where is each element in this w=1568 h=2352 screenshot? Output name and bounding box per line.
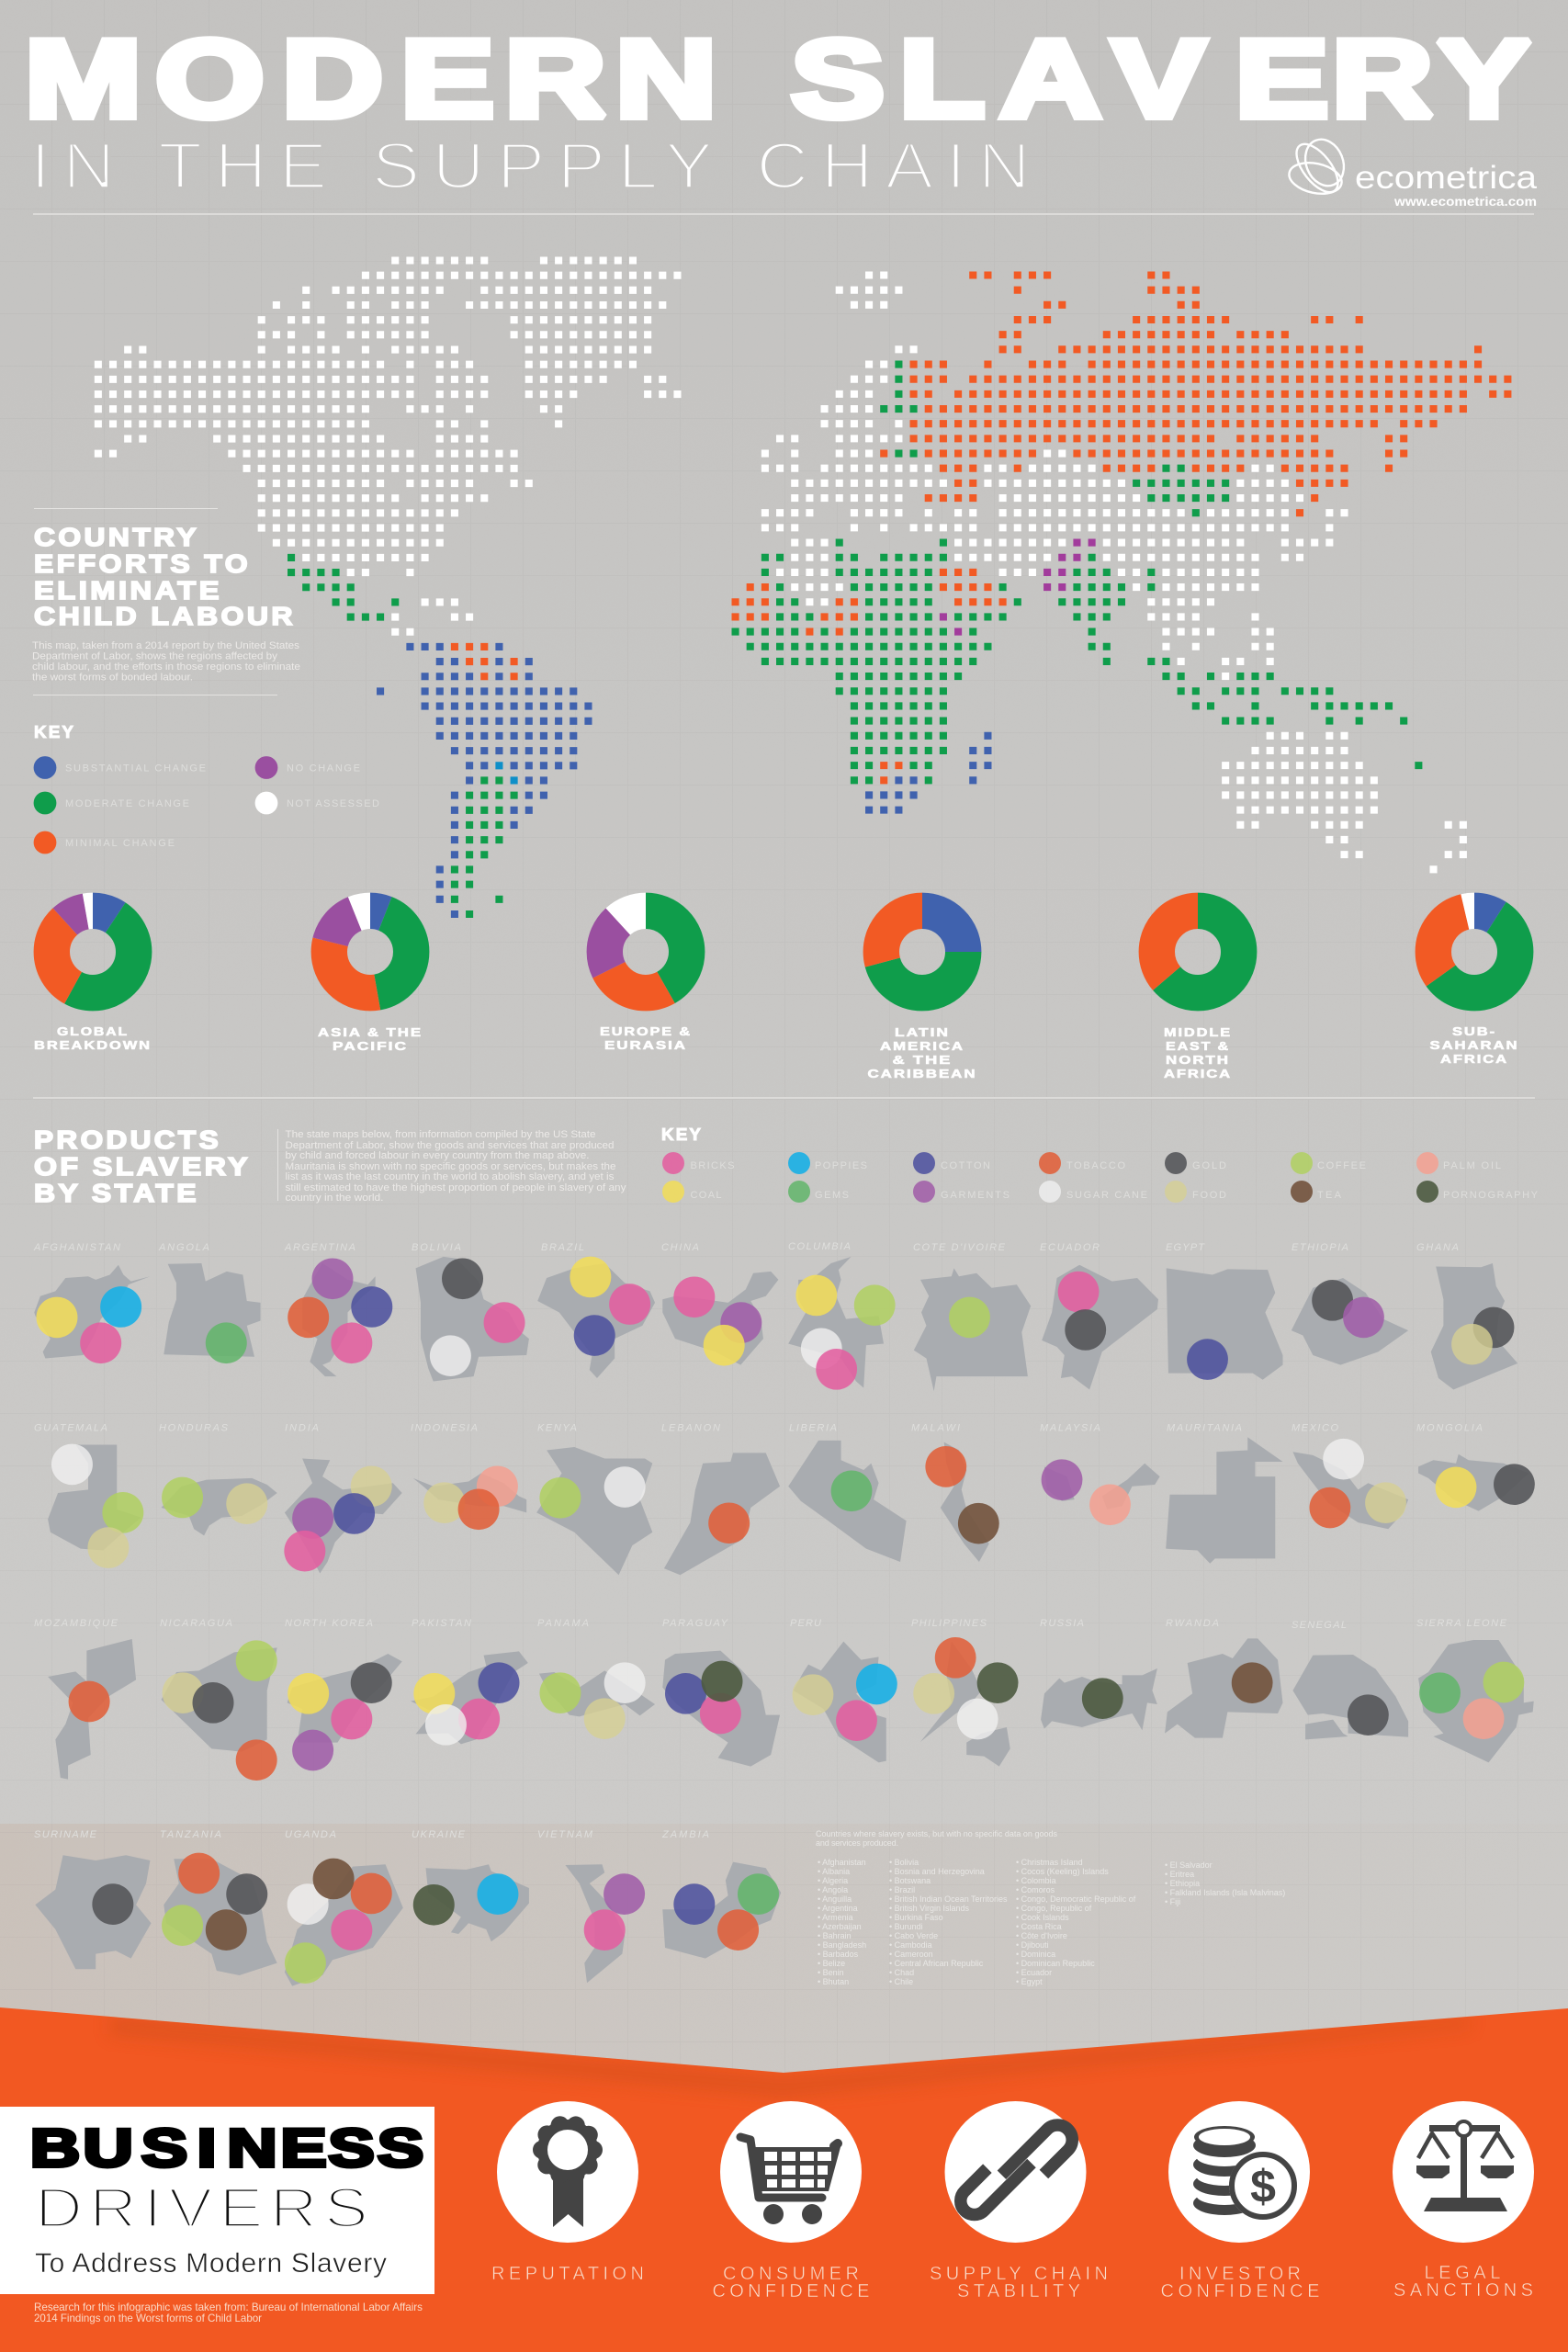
country: Malaysia: MALAYSIA <box>1040 1422 1100 1433</box>
country: Ukraine: UKRAINE <box>412 1829 466 1840</box>
donut label: latin america: LATIN <box>895 1025 950 1039</box>
text block: state maps description: The state maps below, from information compiled by the US State <box>285 1129 595 1140</box>
country: Sierra Leone: SIERRA LEONE <box>1416 1618 1507 1629</box>
list column 2: • Brazil <box>889 1885 915 1894</box>
country: Peru <box>790 1618 897 1762</box>
heading: country efforts <box>34 523 296 630</box>
country: Senegal: SENEGAL <box>1292 1620 1347 1631</box>
list column 3: • Djibouti <box>1016 1940 1049 1950</box>
country: Philippines: PHILIPPINES <box>911 1618 987 1629</box>
donut label: asia <box>318 1025 423 1053</box>
country: Zambia: ZAMBIA <box>661 1829 709 1840</box>
subheading: To Address Modern Slavery <box>35 2248 387 2278</box>
label: reputation: REPUTATION <box>491 2264 644 2284</box>
list column 3: • Dominica <box>1016 1950 1055 1959</box>
list column 3: • Congo, Republic of <box>1016 1904 1092 1913</box>
country: Cote d'Ivoire <box>913 1242 1031 1391</box>
list column 1: • Afghanistan <box>818 1858 866 1867</box>
driver: investor confidence <box>1161 2101 1319 2301</box>
country: Columbia: COLUMBIA <box>788 1241 851 1252</box>
list column 4: • Eritrea <box>1165 1870 1194 1879</box>
country: Zambia <box>661 1829 781 1959</box>
source note: Research for this infographic was taken from: Bureau of International Labor Affairs <box>34 2301 423 2313</box>
world dot map: Americas <box>95 261 682 914</box>
legend: products <box>662 1152 1539 1203</box>
country: North Korea: NORTH KOREA <box>285 1618 373 1629</box>
list column 2: • Cameroon <box>889 1950 933 1959</box>
country: Kenya: KENYA <box>537 1422 577 1433</box>
donut label: middle east: NORTH <box>1166 1053 1230 1067</box>
country: Cote d'Ivoire: COTE D'IVOIRE <box>913 1242 1006 1253</box>
legend: products: POPPIES <box>815 1160 867 1171</box>
list column 3: • Dominican Republic <box>1016 1959 1095 1968</box>
country: Egypt: EGYPT <box>1166 1242 1205 1253</box>
donut label: middle east: EAST & <box>1166 1039 1230 1053</box>
heading: products of slavery: BY STATE <box>34 1179 199 1207</box>
country: Tanzania: TANZANIA <box>160 1829 221 1840</box>
country: Mongolia: MONGOLIA <box>1416 1422 1483 1433</box>
donut label: sub-saharan: SUB- <box>1452 1024 1496 1038</box>
heading: country efforts: CHILD LABOUR <box>34 602 296 630</box>
country: Peru: PERU <box>790 1618 821 1629</box>
country: Panama: PANAMA <box>537 1618 589 1629</box>
legend: products: FOOD <box>1192 1190 1226 1201</box>
country: Mauritania <box>1166 1422 1282 1564</box>
legend: change categories: NOT ASSESSED <box>287 798 379 809</box>
source note: 2014 Findings on the Worst forms of Child Labor <box>34 2312 262 2324</box>
text block: state maps description <box>285 1129 626 1204</box>
country: Angola: ANGOLA <box>158 1242 209 1253</box>
label: supply chain stability <box>930 2264 1108 2301</box>
donut label: sub-saharan <box>1429 1024 1519 1066</box>
country: Russia <box>1040 1618 1157 1730</box>
country: Brazil <box>537 1242 655 1378</box>
country: Ghana: GHANA <box>1416 1242 1459 1253</box>
heading: business: BUSINESS <box>30 2119 423 2178</box>
legend: change categories: MINIMAL CHANGE <box>65 838 175 849</box>
country: Mongolia <box>1416 1422 1535 1511</box>
country: China: CHINA <box>661 1242 699 1253</box>
label: investor confidence: INVESTOR <box>1179 2264 1301 2284</box>
list column 3: • Comoros <box>1016 1885 1055 1894</box>
logo wordmark: ecometrica <box>1355 160 1538 196</box>
country: China <box>661 1242 778 1366</box>
donut label: latin america <box>867 1025 977 1080</box>
list column 3: • Côte d'Ivoire <box>1016 1931 1067 1940</box>
donut label: sub-saharan: AFRICA <box>1440 1052 1508 1066</box>
country: Paraguay: PARAGUAY <box>662 1618 728 1629</box>
country: Nicaragua: NICARAGUA <box>160 1618 232 1629</box>
logo: ecometrica <box>1286 133 1538 209</box>
title line: Modern Slavery: MODERN SLAVERY <box>25 17 1530 141</box>
country: Afghanistan <box>33 1242 150 1363</box>
country: Indonesia <box>411 1422 526 1530</box>
list column 4: • Fiji <box>1165 1897 1180 1906</box>
icon: rosette <box>542 2124 593 2227</box>
donut chart: global breakdown <box>51 910 134 993</box>
label: supply chain stability: SUPPLY CHAIN <box>930 2264 1108 2284</box>
country: Argentina <box>284 1242 392 1376</box>
list column 2: • Botswana <box>889 1876 931 1885</box>
list column 1: • Bahrain <box>818 1931 852 1940</box>
label: supply chain stability: STABILITY <box>957 2281 1080 2301</box>
list column 3: • Ecuador <box>1016 1968 1052 1977</box>
list column 1: • Armenia <box>818 1913 853 1922</box>
list heading: and services produced. <box>816 1838 898 1848</box>
country: Ethiopia: ETHIOPIA <box>1292 1242 1348 1253</box>
label: legal sanctions: LEGAL <box>1424 2263 1501 2283</box>
subtitle: IN THE SUPPLY CHAIN <box>30 130 1043 203</box>
country: Bolivia: BOLIVIA <box>412 1242 461 1253</box>
label: consumer confidence: CONFIDENCE <box>713 2281 869 2301</box>
country: Ecuador: ECUADOR <box>1040 1242 1100 1253</box>
text block: map description: Department of Labor, shows the regions affected by <box>32 650 278 662</box>
icon: coins: $ <box>1250 2161 1276 2212</box>
country: Malaysia <box>1040 1422 1160 1525</box>
country: Mozambique: MOZAMBIQUE <box>34 1618 118 1629</box>
legend: change categories: MODERATE CHANGE <box>65 798 189 809</box>
driver: supply chain stability <box>930 2101 1108 2301</box>
panel: products heading <box>34 1125 703 1207</box>
list column 2: • Chile <box>889 1977 913 1986</box>
text block: map description: the worst forms of bonded labour. <box>32 673 193 684</box>
text block: state maps description: Department of Labor, show the goods and services that are produced <box>285 1140 614 1151</box>
country: Mozambique <box>34 1618 136 1780</box>
list column 1: • Albania <box>818 1867 850 1876</box>
donut label: global <box>34 1024 152 1052</box>
list column 3: • Egypt <box>1016 1977 1043 1986</box>
list heading: Countries where slavery exists, but with no specific data on goods <box>816 1829 1058 1838</box>
legend: products: GOLD <box>1192 1160 1226 1171</box>
donut label: sub-saharan: SAHARAN <box>1429 1038 1519 1052</box>
list column 2: • Burkina Faso <box>889 1913 943 1922</box>
list column 2: • Bolivia <box>889 1858 919 1867</box>
donut label: global: BREAKDOWN <box>34 1038 152 1052</box>
list column 1: • Bhutan <box>818 1977 849 1986</box>
heading: drivers: DRIVERS <box>35 2177 375 2239</box>
country: Ethiopia <box>1292 1242 1408 1365</box>
legend: products: TOBACCO <box>1066 1160 1125 1171</box>
country: Paraguay <box>662 1618 780 1767</box>
legend: products: TEA <box>1317 1190 1342 1201</box>
country: Mexico: MEXICO <box>1292 1422 1338 1433</box>
text block: state maps description: country in the world. <box>285 1193 384 1204</box>
legend: products: SUGAR CANE <box>1066 1190 1147 1201</box>
heading: products of slavery <box>34 1125 251 1207</box>
list column 2: • British Virgin Islands <box>889 1904 970 1913</box>
icon: coins <box>1193 2126 1297 2220</box>
text block: state maps description: Mauritania is shown with no specific goods or services, but makes the <box>285 1161 615 1172</box>
key heading: products: KEY <box>661 1125 703 1144</box>
list column 1: • Bangladesh <box>818 1940 866 1950</box>
country: Ukraine <box>412 1829 529 1941</box>
panel: business drivers orange band <box>0 2007 1568 2352</box>
country: Angola <box>158 1242 261 1363</box>
country: Malawi <box>911 1422 999 1562</box>
text block: map description: child labour, and the efforts in those regions to eliminate <box>32 662 300 673</box>
icon: scales <box>1416 2121 1514 2211</box>
legend: products: PALM OIL <box>1443 1160 1501 1171</box>
label: consumer confidence: CONSUMER <box>723 2264 859 2284</box>
donut label: latin america: CARIBBEAN <box>867 1067 977 1080</box>
country: Mexico <box>1292 1422 1408 1529</box>
donut label: global: GLOBAL <box>57 1024 129 1038</box>
list column 2: • Cambodia <box>889 1940 932 1950</box>
text block: map description <box>32 640 300 684</box>
country: Rwanda <box>1165 1618 1282 1738</box>
icon: chain links <box>955 2109 1078 2232</box>
list column 2: • Central African Republic <box>889 1959 984 1968</box>
heading: country efforts: ELIMINATE <box>34 576 222 605</box>
donut label: asia: ASIA & THE <box>318 1025 423 1039</box>
list column 2: • Burundi <box>889 1922 923 1931</box>
donut label: middle east: AFRICA <box>1164 1067 1232 1080</box>
country: North Korea <box>285 1618 402 1770</box>
list column 3: • Cocos (Keeling) Islands <box>1016 1867 1109 1876</box>
legend: change categories: NO CHANGE <box>287 763 360 774</box>
country: Honduras <box>159 1422 277 1535</box>
country: Senegal <box>1292 1620 1408 1739</box>
country: India: INDIA <box>285 1422 319 1433</box>
country: Suriname <box>34 1829 152 1969</box>
donut chart: latin america <box>881 910 964 993</box>
country: Uganda <box>285 1829 403 1986</box>
country: Lebanon: LEBANON <box>661 1422 720 1433</box>
list column 1: • Benin <box>818 1968 844 1977</box>
label: investor confidence <box>1161 2264 1319 2301</box>
donut chart: middle east and north africa <box>1156 910 1239 993</box>
country: Ecuador <box>1040 1242 1158 1389</box>
list column 1: • Argentina <box>818 1904 858 1913</box>
legend: products: COTTON <box>941 1160 990 1171</box>
list column 3: • Cook Islands <box>1016 1913 1069 1922</box>
list column 3: • Costa Rica <box>1016 1922 1062 1931</box>
list column 1: • Algeria <box>818 1876 848 1885</box>
country: Panama <box>537 1618 655 1739</box>
country: Vietnam <box>537 1829 645 1983</box>
legend: products: PORNOGRAPHY <box>1443 1190 1539 1201</box>
country: Malawi: MALAWI <box>911 1422 960 1433</box>
country: Bolivia <box>412 1242 529 1382</box>
list column 1: • Belize <box>818 1959 845 1968</box>
world dot map: Europe, Asia, Africa, Oceania <box>731 276 1511 869</box>
country: Guatemala: GUATEMALA <box>34 1422 107 1433</box>
heading: country efforts: EFFORTS TO <box>34 549 251 578</box>
donut label: europe: EUROPE & <box>600 1024 692 1038</box>
country: Afghanistan: AFGHANISTAN <box>33 1242 120 1253</box>
panel: country efforts text and key <box>32 508 379 854</box>
country: Uganda: UGANDA <box>285 1829 336 1840</box>
heading: country efforts: COUNTRY <box>34 523 199 551</box>
country: Lebanon <box>661 1422 780 1575</box>
donut label: latin america: AMERICA <box>880 1039 964 1053</box>
country: Brazil: BRAZIL <box>541 1242 584 1253</box>
label: legal sanctions: SANCTIONS <box>1393 2280 1533 2301</box>
list column 2: • Chad <box>889 1968 914 1977</box>
list column 1: • Azerbaijan <box>818 1922 862 1931</box>
country: Philippines <box>911 1618 1018 1767</box>
legend: products: COFFEE <box>1317 1160 1366 1171</box>
country: Liberia: LIBERIA <box>789 1422 837 1433</box>
country: Columbia <box>788 1241 896 1390</box>
label: legal sanctions <box>1393 2263 1533 2301</box>
donut label: middle east: MIDDLE <box>1164 1025 1232 1039</box>
title <box>25 17 1530 203</box>
list column 3: • Congo, Democratic Republic of <box>1016 1894 1136 1904</box>
donut label: europe <box>600 1024 692 1052</box>
country: Pakistan: PAKISTAN <box>412 1618 471 1629</box>
country: Kenya <box>536 1422 652 1575</box>
driver: reputation <box>491 2101 644 2284</box>
legend: change categories <box>34 756 379 854</box>
country: Egypt <box>1166 1242 1282 1380</box>
donut label: middle east <box>1164 1025 1232 1080</box>
text block: state maps description: by child and forced labour in every country from the map above. <box>285 1150 590 1161</box>
legend: change categories: SUBSTANTIAL CHANGE <box>65 763 206 774</box>
heading: products of slavery: PRODUCTS <box>34 1125 221 1154</box>
list column 2: • Cabo Verde <box>889 1931 938 1940</box>
donut label: europe: EURASIA <box>604 1038 687 1052</box>
list column 2: • British Indian Ocean Territories <box>889 1894 1008 1904</box>
country: Honduras: HONDURAS <box>159 1422 229 1433</box>
driver: consumer confidence <box>713 2101 869 2301</box>
list column 4: • Falkland Islands (Isla Malvinas) <box>1165 1888 1285 1897</box>
country: Vietnam: VIETNAM <box>537 1829 593 1840</box>
donut label: latin america: & THE <box>893 1053 952 1067</box>
country: Suriname: SURINAME <box>34 1829 97 1840</box>
icon: shopping cart <box>740 2137 840 2224</box>
driver: legal sanctions <box>1393 2101 1534 2301</box>
country: Pakistan <box>411 1618 528 1746</box>
country: Indonesia: INDONESIA <box>411 1422 478 1433</box>
country: Nicaragua <box>160 1618 277 1781</box>
key heading: KEY <box>34 723 75 741</box>
list column 1: • Barbados <box>818 1950 859 1959</box>
label: investor confidence: CONFIDENCE <box>1161 2281 1319 2301</box>
list column 2: • Bosnia and Herzegovina <box>889 1867 985 1876</box>
country: Liberia <box>788 1422 907 1562</box>
label: consumer confidence <box>713 2264 869 2301</box>
country: Sierra Leone <box>1416 1618 1534 1762</box>
list column 4: • El Salvador <box>1165 1860 1213 1870</box>
text block: state maps description: list as it was the last country in the world to abolish slavery, and yet is <box>285 1171 615 1182</box>
text block: countries with no specific data <box>816 1829 1285 1986</box>
list column 1: • Anguilla <box>818 1894 852 1904</box>
country: Argentina: ARGENTINA <box>284 1242 355 1253</box>
list column 3: • Colombia <box>1016 1876 1056 1885</box>
heading: products of slavery: OF SLAVERY <box>34 1152 251 1181</box>
country: Guatemala <box>34 1422 143 1568</box>
donut chart: europe and eurasia <box>604 910 687 993</box>
source note <box>34 2301 423 2324</box>
legend: products: COAL <box>691 1190 722 1201</box>
legend: products: GEMS <box>815 1190 849 1201</box>
country: Rwanda: RWANDA <box>1166 1618 1219 1629</box>
country: Ghana <box>1416 1242 1517 1389</box>
donut chart: asia and the pacific <box>329 910 412 993</box>
list column 4: • Ethiopia <box>1165 1879 1200 1888</box>
list column 3: • Christmas Island <box>1016 1858 1083 1867</box>
legend: products: GARMENTS <box>941 1190 1010 1201</box>
logo url: www.ecometrica.com <box>1393 194 1537 209</box>
country: Mauritania: MAURITANIA <box>1167 1422 1242 1433</box>
list column 1: • Angola <box>818 1885 848 1894</box>
list heading <box>816 1829 1058 1848</box>
text block: state maps description: still estimated to have the highest proportion of people in slavery of any <box>285 1182 626 1193</box>
country: Tanzania <box>160 1829 277 1975</box>
panel: business drivers title box <box>0 2107 434 2294</box>
country: India <box>284 1422 402 1573</box>
icon: ecometrica rings <box>1286 133 1350 199</box>
donut label: asia: PACIFIC <box>333 1039 408 1053</box>
legend: products: BRICKS <box>691 1160 735 1171</box>
donut chart: sub-saharan africa <box>1433 910 1516 993</box>
country: Russia: RUSSIA <box>1040 1618 1084 1629</box>
text block: map description: This map, taken from a 2014 report by the United States <box>32 640 300 651</box>
